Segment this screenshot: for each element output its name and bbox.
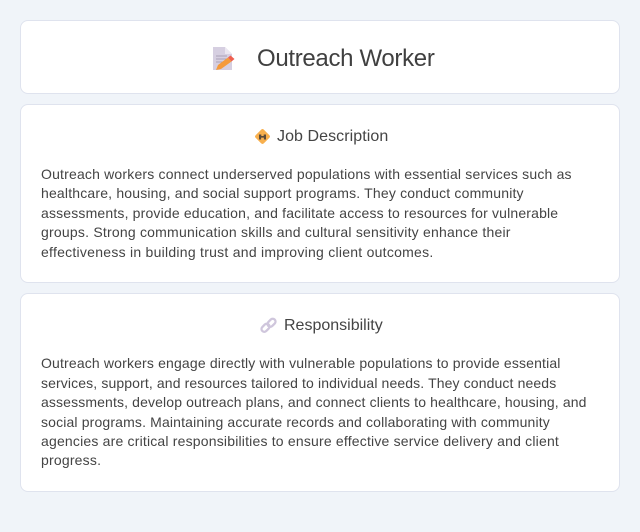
panel: title card	[20, 20, 620, 94]
text block: job description: Outreach workers connect underserved populations with essential services such as	[41, 166, 572, 182]
title: Outreach Worker	[257, 45, 434, 72]
text block: job description	[41, 166, 572, 260]
text block: responsibility: social programs. Maintaining accurate records and collaborating with community	[41, 414, 550, 430]
icon: chain link	[260, 318, 277, 333]
text block: responsibility: services, support, and resources tailored to individual needs. They conduct needs	[41, 375, 556, 391]
text block: responsibility	[41, 355, 587, 468]
heading: job description: Job Description	[277, 128, 388, 145]
text block: job description: healthcare, housing, and social support programs. They conduct community	[41, 185, 524, 201]
icon: document with pencil	[213, 47, 234, 70]
text block: responsibility: assessments, develop outreach plans, and connect clients to healthcare, housing, and	[41, 394, 587, 410]
icon: road sign	[255, 129, 270, 144]
text block: job description: effectiveness in building trust and improving client outcomes.	[41, 244, 434, 260]
panel: job description	[20, 104, 620, 283]
text block: job description: assessments, provide education, and facilitate access to resources for vulnerable	[41, 205, 558, 221]
text block: responsibility: Outreach workers engage directly with vulnerable populations to provide essential	[41, 355, 561, 371]
text block: job description: groups. Strong communication skills and cultural sensitivity enhance their	[41, 224, 511, 240]
text block: responsibility: agencies are critical responsibilities to ensure effective service delivery and client	[41, 433, 559, 449]
panel: responsibility	[20, 293, 620, 492]
heading: responsibility: Responsibility	[284, 317, 383, 334]
text block: responsibility: progress.	[41, 452, 101, 468]
